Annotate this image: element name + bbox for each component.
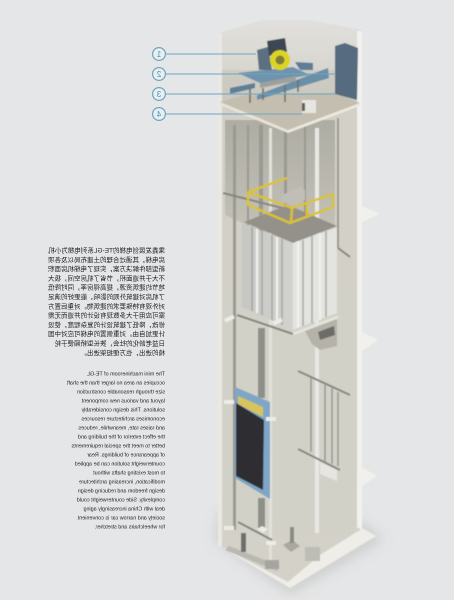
callout 4: 4 bbox=[156, 110, 161, 119]
Chinese description text: 计更加自由。对重侧置的电梯可应对中国 bbox=[48, 329, 165, 338]
car underside equipment bbox=[305, 319, 337, 350]
English description text: economises architecture resources bbox=[81, 416, 165, 422]
callout 4 bbox=[153, 108, 302, 120]
right floor slabs bbox=[358, 205, 380, 487]
callout 1: 1 bbox=[156, 50, 161, 59]
Chinese description text: 日益老龄化的社会，狭长型轿厢便于轮 bbox=[54, 338, 165, 348]
English description text: The mini machineroom of TE-GL bbox=[87, 372, 165, 378]
control cabinet bbox=[335, 43, 358, 100]
English description text: to most existing shafts without bbox=[93, 470, 165, 476]
Chinese description text bbox=[48, 246, 165, 357]
car panel stripes bbox=[252, 227, 326, 326]
callout 2: 2 bbox=[156, 70, 161, 79]
English description text: of appearance of buildings. Rear bbox=[87, 452, 165, 458]
car bottom frame bbox=[293, 317, 338, 334]
shaft walls bbox=[218, 20, 362, 582]
English description text: size through reasonable construction bbox=[77, 390, 165, 396]
car top unit bbox=[282, 187, 305, 206]
Chinese description text: 椅的进出，也方便担架进出。 bbox=[80, 348, 165, 357]
Chinese description text: 了机房对建筑外观的影响，能更好的满足 bbox=[48, 292, 165, 301]
machine beams bbox=[230, 62, 329, 100]
guide rails bbox=[233, 118, 339, 530]
Chinese description text: 乘鑫发展创电梯的TE-GL系列电梯为小机 bbox=[48, 246, 165, 254]
car bright stripes bbox=[257, 229, 320, 328]
elevator car bbox=[242, 205, 338, 350]
shaft interior upper bbox=[225, 120, 335, 245]
English description text: counterweight solution can be applied bbox=[75, 462, 165, 468]
English description text: the effect exterior of the building and bbox=[78, 434, 165, 440]
English description text: better to meet the special requirements bbox=[71, 444, 165, 450]
traction machine bbox=[257, 38, 290, 70]
counterweight frame bbox=[235, 387, 270, 499]
Chinese description text: 对外观有特殊要求的建筑物。对重后置方 bbox=[48, 301, 165, 310]
beam support rods bbox=[250, 80, 298, 103]
English description text: modification, increasing architecture bbox=[79, 480, 165, 486]
Chinese description text: 不大于井道面积，节省了机房空间，极大 bbox=[48, 273, 165, 282]
English description text bbox=[67, 372, 165, 530]
English description text: deal with China increasingly aging bbox=[83, 506, 165, 512]
Chinese description text: 房电梯，其通过合理的土建布局以及各项 bbox=[48, 255, 165, 264]
elevator shaft illustration bbox=[214, 20, 384, 595]
car left face bbox=[242, 223, 293, 330]
side bracket plate bbox=[320, 462, 337, 481]
English description text: solutions. This design considerably bbox=[81, 408, 165, 414]
English description text: complexity. Side counterweight could bbox=[77, 498, 165, 504]
pit buffers bbox=[225, 526, 320, 571]
English description text: and raises rate, meanwhile, reduces bbox=[78, 426, 165, 432]
callout 2 bbox=[153, 68, 335, 80]
English description text: society and narrow car is convenient bbox=[77, 516, 165, 522]
wall edges bbox=[218, 31, 362, 560]
counterweight rods bbox=[311, 378, 338, 466]
callout 3: 3 bbox=[156, 90, 161, 99]
English description text: for wheelchairs and stretcher. bbox=[95, 524, 165, 530]
rail clamps bbox=[224, 315, 283, 545]
callout 3 bbox=[153, 88, 335, 100]
Chinese description text: 地节约建筑资源，提高得房率，同时降低 bbox=[48, 283, 165, 292]
car roof bbox=[244, 205, 337, 243]
English description text: design freedom and reducing design bbox=[78, 488, 165, 494]
rail brackets bbox=[223, 193, 350, 540]
callouts 1-4 bbox=[153, 48, 335, 120]
machine-room box bbox=[302, 100, 316, 113]
floor shadow bbox=[214, 510, 384, 595]
English description text: layout and various new component bbox=[81, 398, 165, 404]
machine room wall shading bbox=[222, 70, 340, 102]
yellow safety railing bbox=[248, 178, 333, 223]
car right face bbox=[293, 227, 337, 330]
English description text: occupies an area no larger than the shaft bbox=[67, 380, 165, 386]
Chinese description text: 案可应用于大多数现有设计的井道而无需 bbox=[48, 311, 165, 320]
Chinese description text: 修改，降低了建筑设计的复杂程度，使设 bbox=[48, 320, 165, 329]
machine room floor slab bbox=[220, 93, 360, 130]
Chinese description text: 新型部件解决方案，实现了电梯机房面积 bbox=[48, 264, 165, 273]
floor slab base bbox=[223, 527, 376, 588]
callout 1 bbox=[153, 48, 256, 60]
